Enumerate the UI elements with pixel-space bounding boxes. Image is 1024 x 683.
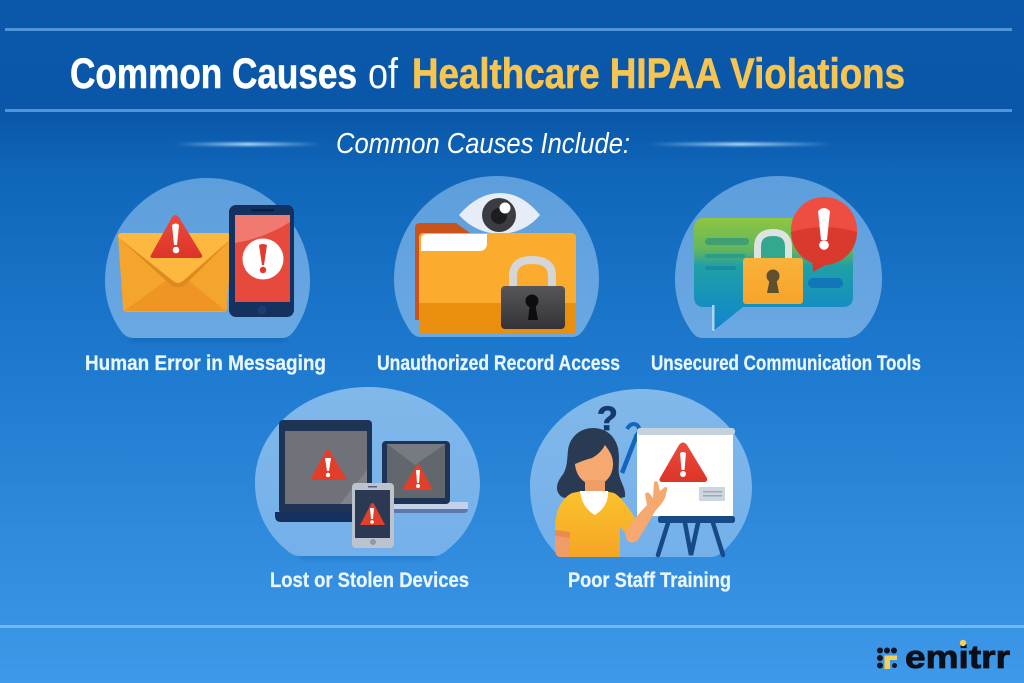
icon: phone <box>352 483 394 548</box>
icon: phone with alert <box>229 205 294 317</box>
logo: emitrr <box>877 639 1010 675</box>
panel: human error in messaging <box>105 178 310 341</box>
header rules <box>5 28 1012 112</box>
icon: question marks: ? <box>597 400 618 438</box>
icon: chat bubble <box>694 218 853 332</box>
subtitle with side rules <box>175 128 832 160</box>
icon: padlock <box>501 260 565 329</box>
icon: envelope <box>118 233 232 312</box>
icon backdrop <box>675 176 882 338</box>
icon: presentation board <box>637 428 735 555</box>
icon: small laptop <box>382 441 468 513</box>
collar <box>580 491 608 515</box>
icon: folder <box>415 223 576 334</box>
subtitle with side rules: Common Causes Include: <box>336 128 630 160</box>
label: human error in messaging: Human Error in Messaging <box>85 352 326 375</box>
icon: padlock <box>743 232 803 304</box>
title: of <box>368 50 399 98</box>
face <box>575 445 613 485</box>
panel: unsecured communication tools <box>675 176 882 338</box>
left arm <box>555 530 570 538</box>
title: Common Causes <box>70 50 357 98</box>
icon backdrop <box>105 178 310 338</box>
label: lost or stolen devices: Lost or Stolen Devices <box>270 569 469 592</box>
icon backdrop <box>530 389 752 557</box>
icon: large laptop <box>275 420 372 522</box>
logo dot <box>960 640 966 646</box>
shirt <box>555 491 635 557</box>
label: unsecured communication tools: Unsecured Communication Tools <box>651 352 921 375</box>
icon: alert speech bubble <box>791 197 857 272</box>
icon backdrop shadow <box>300 555 435 559</box>
label: unauthorized record access: Unauthorized Record Access <box>377 352 620 375</box>
title: Healthcare HIPAA Violations <box>412 50 905 98</box>
label: poor staff training: Poor Staff Training <box>568 569 731 592</box>
hair <box>557 428 625 500</box>
neck <box>585 480 605 498</box>
icon: eye <box>459 193 540 234</box>
panel: unauthorized record access <box>394 176 599 337</box>
icon backdrop <box>394 176 599 337</box>
icon: warning triangle <box>150 215 202 258</box>
footer rule <box>0 625 1024 628</box>
logo mark <box>877 648 897 669</box>
panel: poor staff training <box>530 389 752 557</box>
icon backdrop shadow <box>130 337 285 341</box>
logo wordmark: emitrr <box>905 639 1010 675</box>
panel: lost or stolen devices <box>255 387 480 559</box>
right arm and hand <box>625 481 667 542</box>
icon: person <box>555 428 667 557</box>
icon backdrop <box>255 387 480 556</box>
icon: question marks <box>597 400 639 473</box>
